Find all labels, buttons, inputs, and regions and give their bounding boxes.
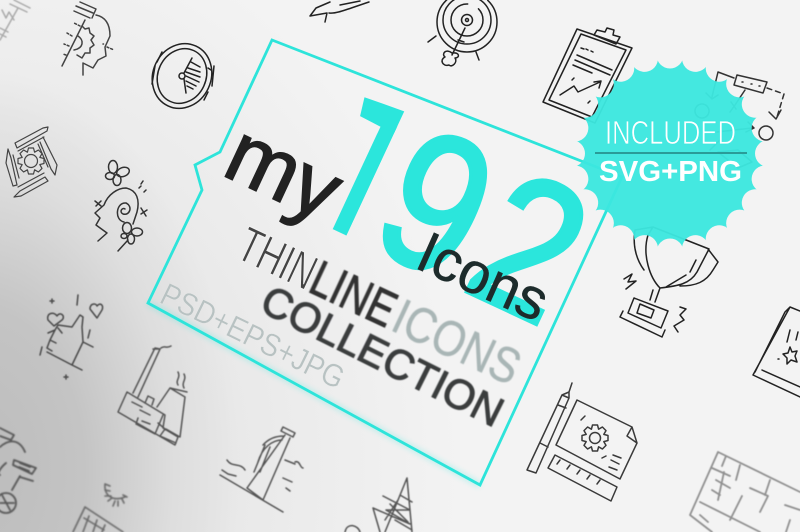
icon: target	[428, 0, 497, 66]
icon: thumbs up with hearts	[40, 295, 103, 379]
icon: book	[753, 307, 800, 397]
badge text: INCLUDED: INCLUDED	[605, 114, 736, 151]
icon: dam	[220, 427, 303, 512]
subheading: THIN LINE ICONS: ICONS	[384, 288, 529, 396]
headline: number 192	[332, 97, 584, 327]
headline: Icons: Icons	[408, 219, 558, 334]
icon: clipboard	[543, 28, 632, 123]
badge divider	[595, 152, 747, 154]
icon: gear and pencils	[6, 127, 57, 197]
icon: blueprint	[527, 383, 637, 501]
subheading: COLLECTION: COLLECTION	[254, 276, 511, 436]
icon: flower head	[95, 160, 147, 251]
icon: flowchart behind badge	[695, 72, 784, 168]
text: file formats: PSD+EPS+JPG	[155, 276, 350, 396]
subheading: THIN LINE ICONS: LINE	[302, 250, 405, 338]
panel: cyan outlined frame	[148, 40, 622, 485]
headline: number 192: 2	[441, 128, 619, 365]
subheading: THIN LINE ICONS: THIN	[229, 216, 326, 301]
icon: clock	[142, 34, 222, 118]
icon: gear plus at lower left	[0, 428, 36, 513]
icon: faint pencil top left	[0, 0, 30, 40]
headline: number 192: 9	[348, 85, 525, 322]
headline: number 192: 1	[263, 62, 453, 305]
icon: maze	[690, 452, 800, 532]
badge: included formats	[577, 60, 763, 247]
icon: head with gear	[62, 2, 114, 75]
icon: hand	[310, 1, 369, 22]
badge text: SVG+PNG: SVG+PNG	[599, 156, 742, 188]
headline: my: my	[212, 104, 356, 240]
icon: keyboard	[73, 507, 123, 532]
icon: trophy	[620, 227, 718, 337]
badge scalloped shape	[577, 60, 763, 247]
icon: eye lashes	[105, 484, 127, 506]
icon: factory	[118, 346, 187, 445]
icon: transmission tower	[345, 478, 412, 532]
subheading: THIN LINE ICONS	[229, 216, 529, 396]
